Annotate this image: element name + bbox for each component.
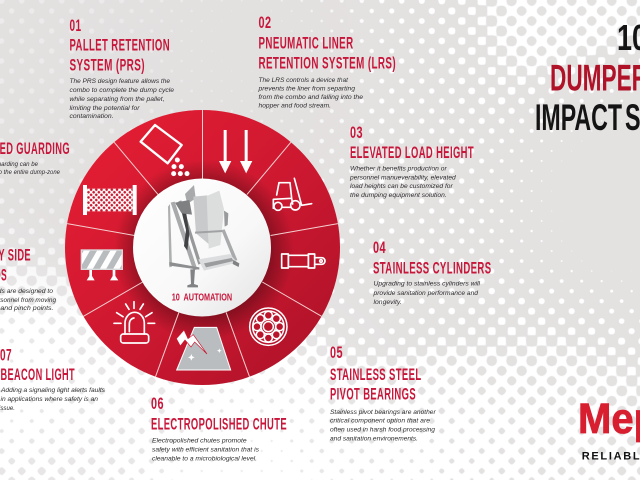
callout 01: pallet retention system: contamination. [70, 113, 114, 120]
callout 03: elevated load height: 03 [350, 123, 363, 142]
icon: barricade [81, 250, 122, 280]
callout 07: beacon light: 07 [0, 346, 12, 365]
callout 08: safety side guards [0, 246, 56, 312]
icon group in 3x coordinates [81, 125, 325, 370]
icon: down arrows [219, 130, 252, 173]
callout 03: elevated load height: the dumping equipment solution. [350, 192, 447, 199]
main title [535, 17, 640, 138]
icon: forklift [273, 178, 312, 210]
callout 06: electropolished chute: Electropolished chutes promote [152, 438, 247, 445]
callout 05: stainless steel pivot bearings: STAINLESS STEEL [330, 365, 422, 384]
callout 05: stainless steel pivot bearings: PIVOT BEARINGS [330, 384, 416, 404]
callout 04: stainless cylinders: provide sanitation performance and [372, 290, 478, 297]
callout 02: pneumatic liner retention system: RETENTION SYSTEM (LRS) [258, 53, 396, 72]
callout 03: elevated load height: load heights can be customized for [350, 183, 454, 190]
callout 02: pneumatic liner retention system: hopper and food stream. [258, 102, 331, 110]
callout 02: pneumatic liner retention system: from the combo and falling into the [258, 94, 363, 101]
callout 02: pneumatic liner retention system: 02 [258, 13, 272, 32]
callout 01: pallet retention system: 01 [70, 16, 82, 35]
callout 06: electropolished chute: ELECTROPOLISHED CHUTE [151, 414, 287, 434]
callout 05: stainless steel pivot bearings [330, 343, 437, 443]
callout 01: pallet retention system: while separating from the pallet, [70, 96, 165, 103]
callout 02: pneumatic liner retention system [257, 13, 396, 110]
wheel disc [65, 110, 340, 385]
callout 04: stainless cylinders: 04 [373, 238, 386, 257]
icon: fence guarding [83, 185, 137, 215]
callout 02: pneumatic liner retention system: PNEUMATIC LINER [258, 34, 354, 53]
callout 07: beacon light [0, 346, 106, 412]
callout 02: pneumatic liner retention system: The LRS controls a device that [258, 77, 348, 84]
callout 04: stainless cylinders [372, 238, 492, 306]
callout 07: beacon light: in applications where safety is an [0, 396, 98, 403]
callout 01: pallet retention system: PALLET RETENTION [70, 36, 170, 54]
callout 07: beacon light: Adding a signaling light alerts faults [0, 387, 106, 394]
callout 02: pneumatic liner retention system: prevents the liner from separting [257, 86, 355, 92]
callout 01: pallet retention system: combo to complete the dump cycle [70, 87, 174, 94]
callout 06: electropolished chute: safety with efficient sanitation that is [152, 447, 260, 454]
segment dividers [67, 110, 338, 377]
icon: electropolished chute [176, 327, 231, 370]
icon: cylinder [282, 254, 325, 268]
center hub [133, 178, 271, 316]
callout 01: pallet retention system: limiting the potential for [70, 105, 140, 112]
callout 05: stainless steel pivot bearings: critical component option that are [330, 418, 430, 425]
dial wheel [65, 110, 341, 387]
callout 03: elevated load height [349, 123, 474, 199]
callout 04: stainless cylinders: STAINLESS CYLINDERS [373, 258, 492, 277]
callout 04: stainless cylinders: longevity. [374, 299, 402, 306]
callout 05: stainless steel pivot bearings: often used in harsh food processing [330, 427, 435, 434]
callout 01: pallet retention system: The PRS design feature allows the [70, 78, 170, 85]
dumper machine illustration [168, 185, 239, 287]
callout 01: pallet retention system: SYSTEM (PRS) [70, 56, 145, 74]
callout 05: stainless steel pivot bearings: Stainless pivot bearings are another [330, 409, 437, 416]
callout 05: stainless steel pivot bearings: 05 [330, 343, 343, 362]
callout 06: electropolished chute [151, 394, 287, 462]
icon: bearing [250, 308, 287, 345]
callout 06: electropolished chute: 06 [151, 394, 164, 413]
hub label: 10 AUTOMATION [172, 293, 232, 304]
callout 04: stainless cylinders: Upgrading to stainless cylinders will [374, 281, 481, 288]
callout 03: elevated load height: ELEVATED LOAD HEIGHT [350, 143, 474, 162]
callout 05: stainless steel pivot bearings: and sanitation environements. [330, 436, 418, 443]
callout 03: elevated load height: Whether it benefits production or [350, 166, 448, 172]
callout 06: electropolished chute: cleanable to a microbiological level. [152, 455, 257, 462]
icon: pallet and product [141, 125, 189, 176]
callout 01: pallet retention system [70, 16, 174, 120]
hub shadow [67, 113, 341, 387]
callout 03: elevated load height: personnel manueverability, elevated [349, 174, 456, 182]
callout 07: beacon light: BEACON LIGHT [0, 365, 75, 384]
callout 09: fixed guarding [0, 139, 70, 176]
icon: beacon light [114, 302, 155, 343]
